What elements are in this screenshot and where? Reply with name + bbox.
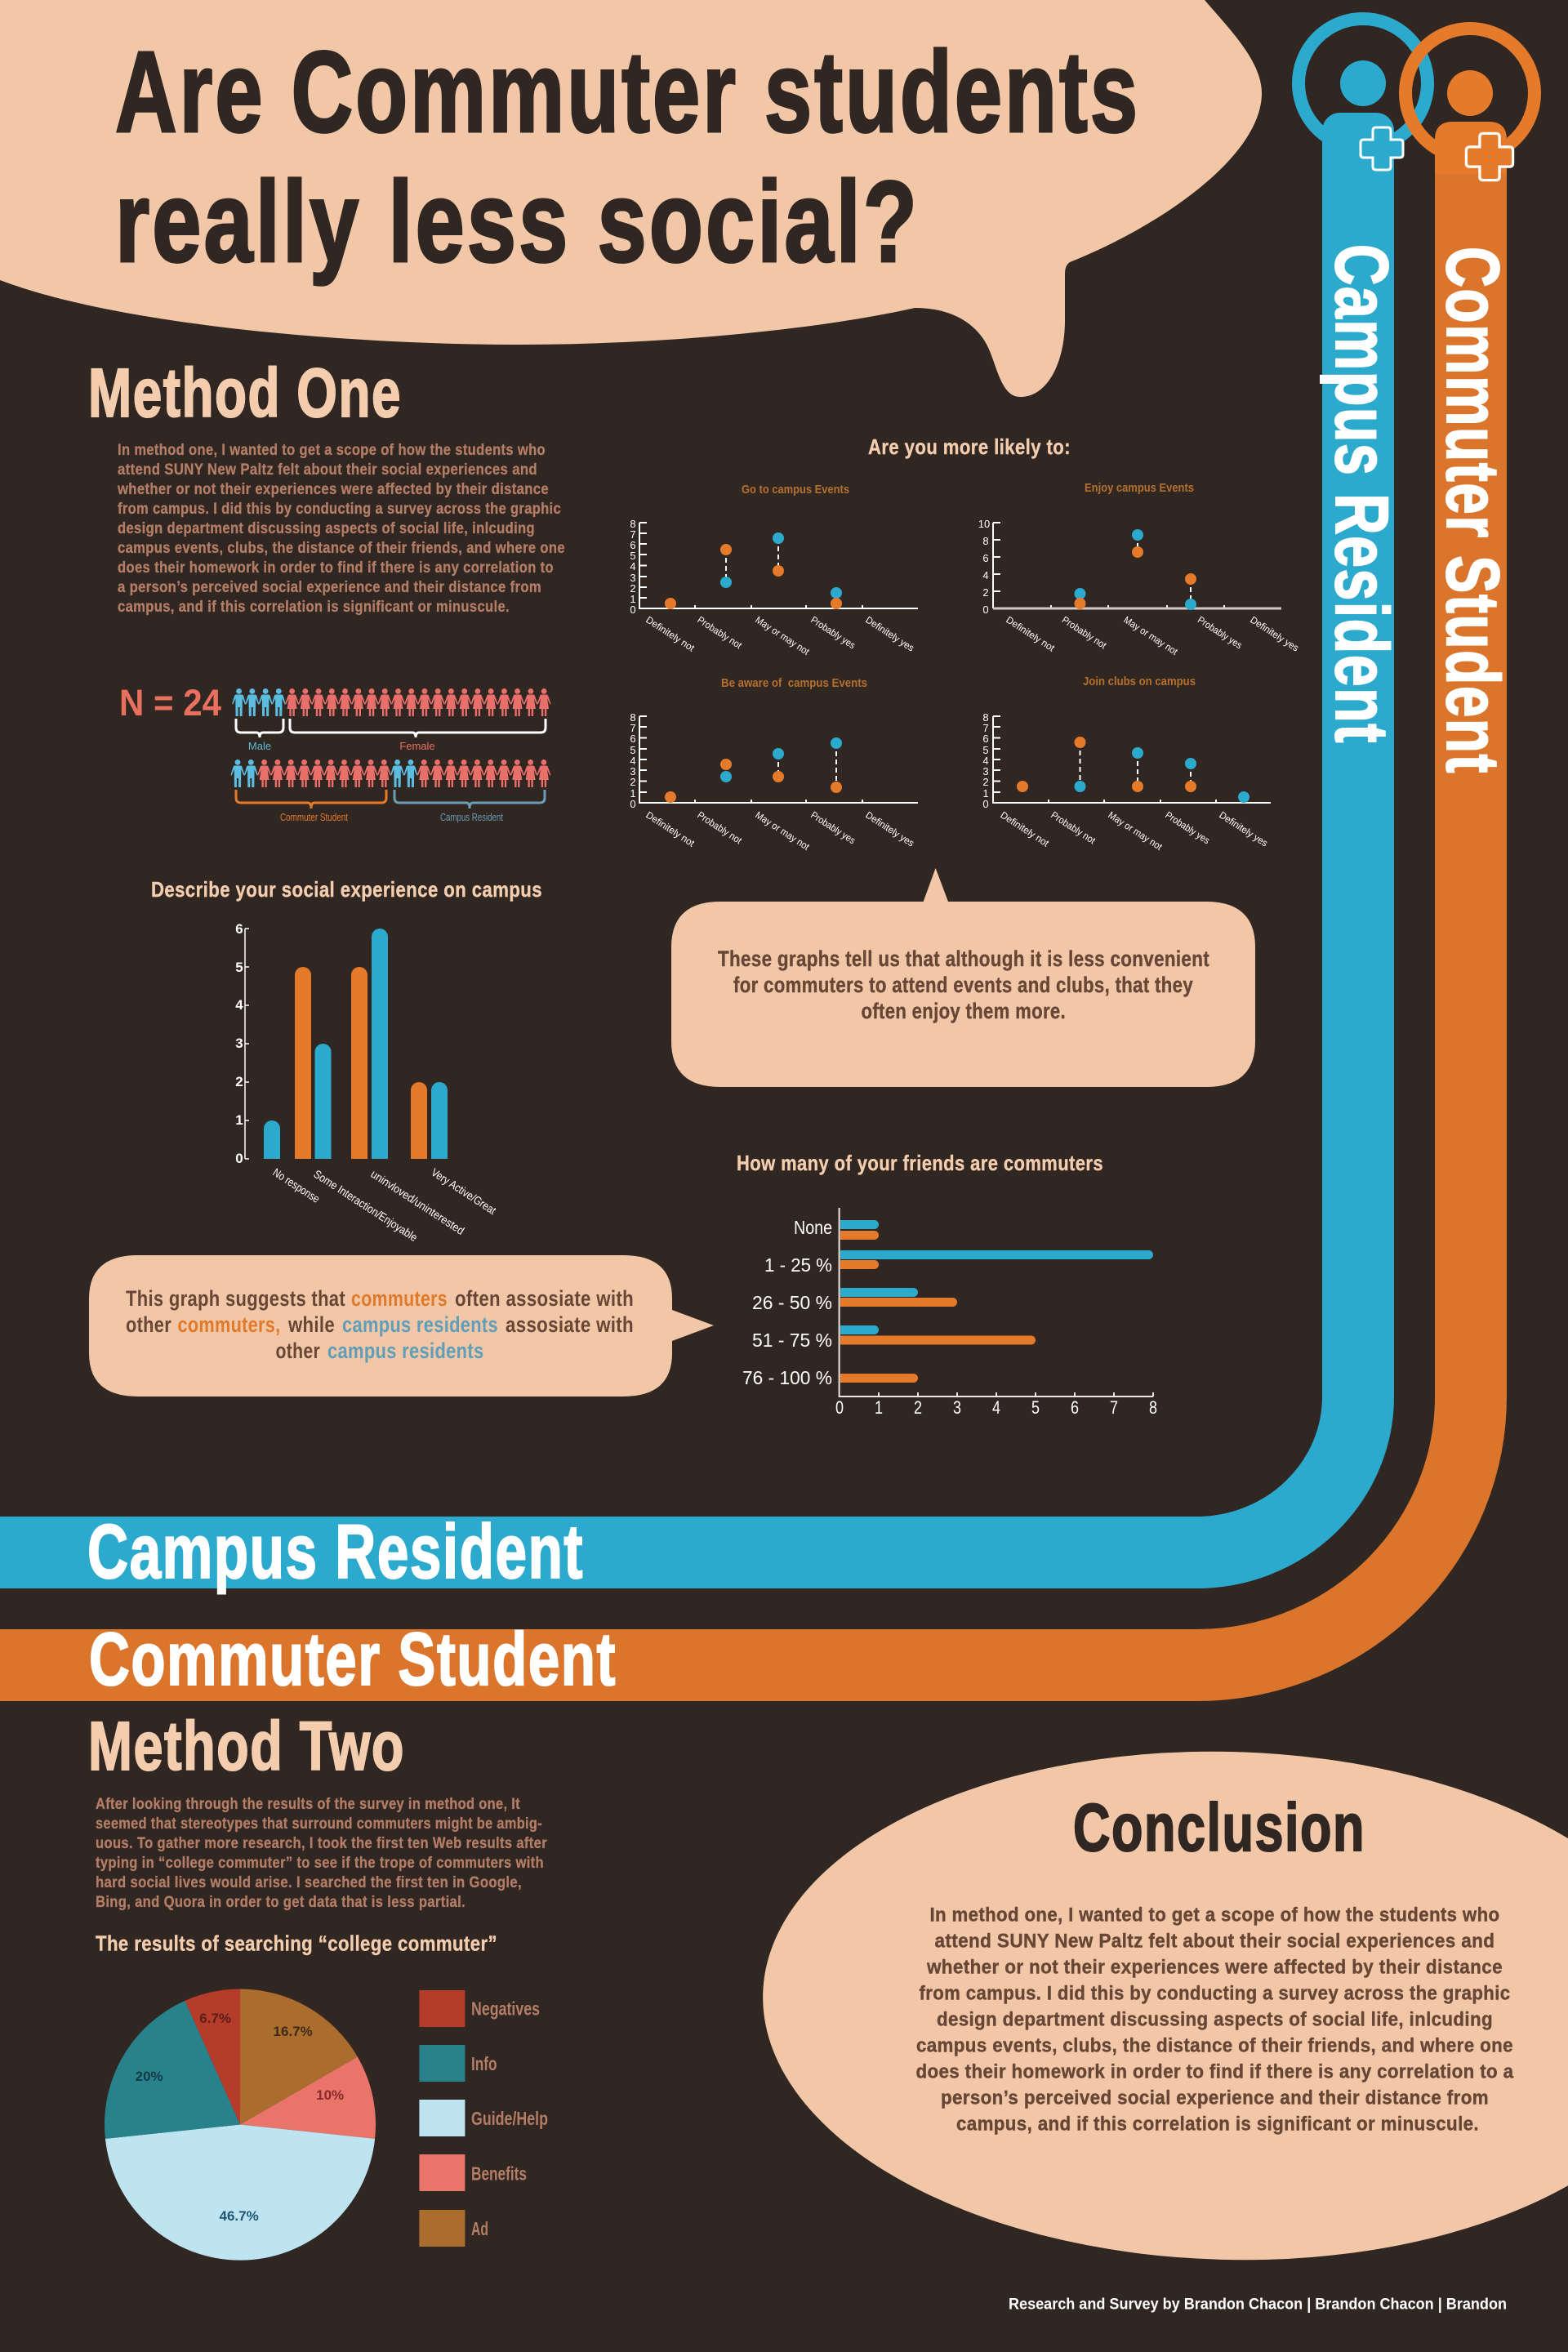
pie chart: search results: 16.7%: [274, 2024, 313, 2039]
horizontal bar chart: friends who commute: 4: [992, 1397, 1000, 1418]
bar chart: social experience: 6: [235, 921, 243, 937]
text block: conclusion body: attend SUNY New Paltz felt about their social experiences and: [934, 1931, 1494, 1952]
title: really less social?: [115, 157, 920, 286]
dot chart: be aware of campus events: 1: [630, 787, 636, 800]
horizontal bar chart: friends who commute: 6: [1071, 1397, 1079, 1418]
dot chart: join clubs on campus: 3: [982, 765, 989, 777]
dot chart: join clubs on campus: 2: [982, 776, 989, 788]
bar chart: social experience: No response: [270, 1165, 323, 1205]
text block: conclusion body: does their homework in order to find if there is any correlation to a: [915, 2061, 1514, 2082]
pie legend: Guide/Help: [471, 2108, 548, 2129]
horizontal bar chart: friends who commute: 2: [914, 1397, 922, 1418]
dot chart: go to campus events: 2: [630, 582, 636, 595]
callout: graphs conclusion: often enjoy them more.: [861, 999, 1066, 1023]
label: female: Female: [399, 740, 435, 752]
pie chart: search results: 10%: [316, 2087, 344, 2103]
icon: orange plus: [1466, 133, 1513, 180]
dot chart: be aware of campus events: [630, 676, 918, 853]
dot chart: enjoy campus events: Probably yes: [1196, 614, 1245, 651]
heading: results of searching: The results of searching “college commuter”: [96, 1931, 497, 1955]
dot chart: be aware of campus events: Probably not: [695, 809, 744, 847]
dot chart: be aware of campus events: Probably yes: [808, 809, 858, 846]
pie legend: Benefits: [471, 2163, 527, 2184]
dot chart: be aware of campus events: 2: [630, 776, 636, 788]
title speech bubble: [0, 0, 1262, 397]
text block: method one description: In method one, I wanted to get a scope of how the students who: [118, 442, 546, 459]
brace: male: [236, 719, 283, 737]
callout: friends graph: commuters,: [178, 1312, 281, 1337]
callout: graphs conclusion: These graphs tell us that although it is less convenient: [718, 947, 1209, 971]
chart title: Be aware of campus Events: [721, 676, 867, 690]
text block: method one description: a person’s perceived social experience and their distance from: [118, 579, 541, 596]
label: male: Male: [248, 740, 271, 752]
dot chart: join clubs on campus: 1: [982, 787, 989, 800]
dot chart: enjoy campus events: May or may not: [1121, 614, 1180, 657]
dot chart: enjoy campus events: 2: [982, 586, 989, 599]
horizontal bar chart: friends who commute: 76 - 100 %: [742, 1367, 832, 1388]
horizontal bar chart: friends who commute: 7: [1110, 1397, 1118, 1418]
dot chart: join clubs on campus: Probably yes: [1163, 809, 1212, 846]
text block: method one description: from campus. I did this by conducting a survey across the graphic: [118, 501, 561, 518]
heading: method two: Method Two: [88, 1708, 405, 1784]
pie legend: [419, 1990, 553, 2247]
callout: graphs conclusion: [671, 868, 1255, 1087]
bar chart: social experience: 1: [235, 1112, 243, 1128]
pie legend: Info: [471, 2053, 497, 2074]
dot chart: enjoy campus events: 10: [978, 518, 990, 530]
horizontal bar chart: friends who commute: [742, 1208, 1157, 1418]
bar chart: social experience: 4: [235, 997, 243, 1013]
callout: friends graph: campus residents: [327, 1339, 483, 1363]
bar chart: social experience: 3: [235, 1036, 243, 1051]
sample size label: N = 24: [119, 682, 221, 724]
dot chart: go to campus events: Probably not: [695, 614, 744, 652]
dot chart: go to campus events: 5: [630, 550, 636, 562]
text block: method two description: hard social lives would arise. I searched the first ten in Google,: [96, 1874, 522, 1891]
bar chart: social experience: 5: [235, 960, 243, 975]
bar chart: social experience: Some Interaction/Enjoyable: [311, 1167, 420, 1244]
ribbon label: campus resident vertical: Campus Resident: [1320, 244, 1403, 744]
dot chart: be aware of campus events: 7: [630, 722, 636, 734]
dot chart: enjoy campus events: 4: [982, 569, 989, 581]
text block: conclusion body: person’s perceived social experience and their distance from: [941, 2087, 1489, 2109]
dot chart: enjoy campus events: Definitely not: [1004, 614, 1058, 654]
callout: graphs conclusion: for commuters to attend events and clubs, that they: [733, 973, 1193, 997]
dot chart: join clubs on campus: 5: [982, 744, 989, 756]
icon: commuter person: [1405, 29, 1535, 174]
dot chart: be aware of campus events: 6: [630, 733, 636, 745]
bars: [264, 929, 448, 1159]
label: commuter student: Commuter Student: [280, 811, 348, 823]
pie chart: search results: 46.7%: [219, 2208, 259, 2224]
bar chart: social experience: uninvloved/uninterested: [368, 1167, 467, 1237]
pictogram row: commuter and resident: [230, 760, 550, 787]
ribbon label: commuter student horizontal: Commuter Student: [89, 1618, 617, 1701]
text block: method two description: seemed that stereotypes that surround commuters might be ambig-: [96, 1815, 542, 1833]
callout: friends graph: while: [287, 1312, 335, 1337]
callout: friends graph: assosiate with: [506, 1312, 634, 1337]
dot chart: join clubs on campus: Definitely yes: [1217, 809, 1270, 849]
conclusion panel: [756, 1740, 1568, 2272]
horizontal bar chart: friends who commute: 1: [875, 1397, 883, 1418]
dot chart: go to campus events: 7: [630, 528, 636, 541]
dot chart: enjoy campus events: 8: [982, 535, 989, 547]
dot chart: go to campus events: 0: [630, 604, 636, 616]
dot chart: go to campus events: Probably yes: [808, 614, 858, 651]
horizontal bar chart: friends who commute: 26 - 50 %: [752, 1292, 832, 1313]
heading: conclusion: Conclusion: [1073, 1789, 1365, 1865]
bars: [840, 1220, 1153, 1383]
bar chart: social experience: 0: [235, 1151, 243, 1166]
dot chart: go to campus events: 4: [630, 560, 636, 572]
brace: commuter student: [236, 790, 386, 808]
pie legend: Negatives: [471, 1998, 540, 2019]
dot chart: go to campus events: 6: [630, 539, 636, 551]
text block: conclusion body: campus events, clubs, the distance of their friends, and where one: [916, 2035, 1513, 2056]
dot chart: join clubs on campus: [982, 675, 1271, 853]
text block: method one description: does their homework in order to find if there is any correlation to: [118, 559, 554, 577]
dot chart: go to campus events: Definitely not: [644, 614, 697, 654]
dot chart: join clubs on campus: 6: [982, 733, 989, 745]
icon: blue plus: [1361, 127, 1403, 170]
ribbon label: campus resident horizontal: Campus Resident: [87, 1508, 584, 1594]
text block: conclusion body: from campus. I did this by conducting a survey across the graphic: [919, 1983, 1510, 2004]
icon: campus resident person: [1298, 19, 1428, 194]
dot chart: be aware of campus events: 5: [630, 744, 636, 756]
text block: conclusion body: design department discussing aspects of social life, inlcuding: [937, 2009, 1493, 2030]
dot chart: join clubs on campus: 0: [982, 798, 989, 810]
pie chart: search results: [105, 1989, 376, 2261]
dot chart: join clubs on campus: Definitely not: [998, 809, 1052, 849]
dot chart: go to campus events: 1: [630, 593, 636, 605]
dot chart: go to campus events: Definitely yes: [863, 614, 916, 654]
sample size panel: [119, 682, 551, 823]
callout: friends graph: [89, 1255, 714, 1396]
bar chart: social experience: 2: [235, 1074, 243, 1089]
bar chart: social experience: Very Active/Great: [429, 1165, 498, 1217]
dot chart: go to campus events: [630, 483, 918, 657]
dot chart: join clubs on campus: May or may not: [1106, 809, 1165, 853]
chart title: Enjoy campus Events: [1085, 481, 1194, 495]
dot chart: enjoy campus events: 0: [982, 604, 989, 616]
horizontal bar chart: friends who commute: 51 - 75 %: [752, 1330, 832, 1351]
dot chart: be aware of campus events: 0: [630, 798, 636, 810]
horizontal bar chart: friends who commute: 5: [1031, 1397, 1040, 1418]
brace: female: [290, 719, 546, 737]
heading: are you more likely to: Are you more likely to:: [868, 434, 1071, 459]
bar chart: social experience: [235, 921, 498, 1244]
pie legend: Ad: [471, 2218, 488, 2239]
text block: conclusion body: campus, and if this correlation is significant or minuscule.: [956, 2114, 1479, 2135]
text block: conclusion body: whether or not their experiences were affected by their distance: [926, 1957, 1503, 1978]
text block: method one description: attend SUNY New Paltz felt about their social experiences and: [118, 461, 537, 479]
callout: friends graph: This graph suggests that: [126, 1286, 345, 1311]
text block: method two description: After looking through the results of the survey in method one, It: [96, 1796, 520, 1813]
horizontal bar chart: friends who commute: 1 - 25 %: [764, 1254, 832, 1276]
ribbon label: commuter student vertical: Commuter Student: [1431, 247, 1514, 774]
title: Are Commuter students: [115, 27, 1140, 156]
dot chart: be aware of campus events: 4: [630, 755, 636, 767]
chart title: Join clubs on campus: [1083, 675, 1196, 688]
dot chart: be aware of campus events: 3: [630, 765, 636, 777]
dot chart: enjoy campus events: 6: [982, 552, 989, 564]
callout: friends graph: campus residents: [342, 1312, 498, 1337]
text block: conclusion body: In method one, I wanted to get a scope of how the students who: [929, 1904, 1499, 1926]
callout: friends graph: other: [126, 1312, 172, 1337]
dot chart: be aware of campus events: 8: [630, 711, 636, 724]
dot chart: join clubs on campus: 7: [982, 722, 989, 734]
label: campus resident: Campus Resident: [440, 811, 503, 823]
dot chart: join clubs on campus: 4: [982, 755, 989, 767]
text block: method one description: campus events, clubs, the distance of their friends, and where one: [118, 540, 565, 557]
text block: method two description: Bing, and Quora in order to get data that is less partial.: [96, 1894, 466, 1911]
dot chart: join clubs on campus: Probably not: [1049, 809, 1098, 847]
dot chart: go to campus events: 3: [630, 572, 636, 584]
horizontal bar chart: friends who commute: None: [794, 1217, 832, 1238]
text block: method one description: whether or not their experiences were affected by their distance: [117, 481, 549, 498]
brace: campus resident: [394, 790, 545, 808]
text block: method two description: typing in “college commuter” to see if the trope of commuters with: [96, 1855, 544, 1872]
heading: how many of your friends: How many of your friends are commuters: [737, 1151, 1103, 1175]
pie chart: search results: 20%: [136, 2069, 163, 2084]
pictogram row: male and female: [232, 688, 551, 716]
dot chart: go to campus events: May or may not: [753, 614, 812, 657]
horizontal bar chart: friends who commute: 0: [835, 1397, 844, 1418]
footer credit: Research and Survey by Brandon Chacon | Brandon Chacon | Brandon: [1009, 2296, 1507, 2313]
callout: friends graph: commuters: [351, 1286, 448, 1311]
dot chart: go to campus events: 8: [630, 518, 636, 530]
pie chart: search results: 6.7%: [199, 2011, 231, 2026]
text block: method one description: campus, and if this correlation is significant or minuscule.: [118, 599, 510, 616]
heading: describe your social experience: Describe your social experience on campus: [151, 877, 542, 902]
horizontal bar chart: friends who commute: 8: [1149, 1397, 1157, 1418]
callout: friends graph: often assosiate with: [455, 1286, 634, 1311]
dot chart: be aware of campus events: May or may not: [753, 809, 812, 853]
heading: method one: Method One: [88, 354, 402, 431]
dot chart: be aware of campus events: Definitely yes: [863, 809, 916, 849]
dot chart: join clubs on campus: 8: [982, 711, 989, 724]
horizontal bar chart: friends who commute: 3: [953, 1397, 961, 1418]
text block: method two description: uous. To gather more research, I took the first ten Web results after: [96, 1835, 547, 1852]
text block: method one description: design department discussing aspects of social life, inlcuding: [118, 520, 535, 537]
dot chart: enjoy campus events: Definitely yes: [1248, 614, 1301, 654]
chart title: Go to campus Events: [742, 483, 849, 497]
callout: friends graph: other: [276, 1339, 320, 1363]
dot chart: enjoy campus events: [978, 481, 1301, 657]
dot chart: be aware of campus events: Definitely not: [644, 809, 697, 849]
dot chart: enjoy campus events: Probably not: [1060, 614, 1109, 652]
